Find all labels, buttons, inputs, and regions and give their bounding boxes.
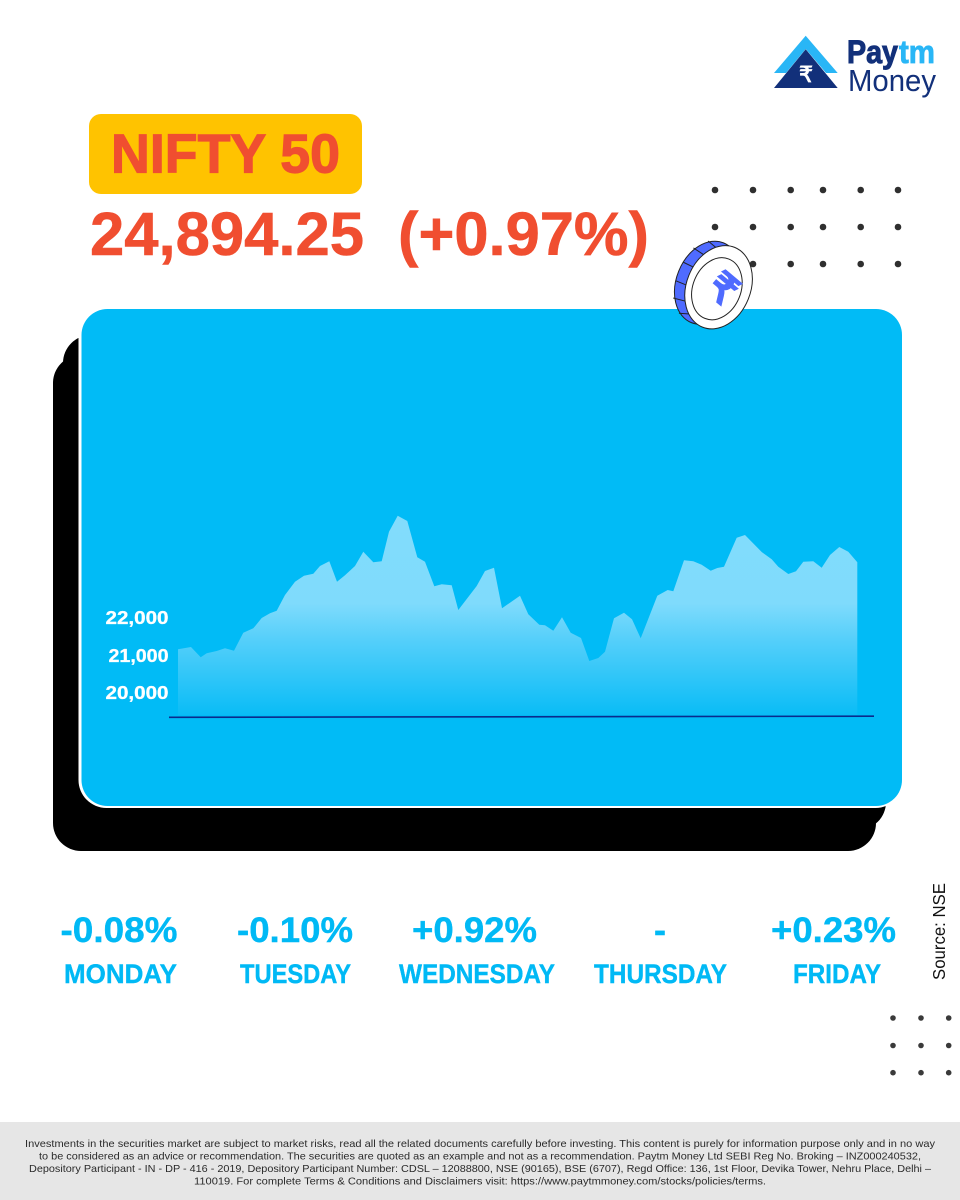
dot grid: top right: [712, 187, 901, 267]
stat: Thursday: [594, 911, 727, 989]
axis label: 21,000: 21,000: [108, 646, 168, 666]
stat: Monday: MONDAY: [64, 959, 177, 989]
stat: Friday: +0.23%: [771, 911, 896, 950]
footer disclaimer: [0, 1122, 960, 1200]
stat: Wednesday: WEDNESDAY: [399, 959, 555, 989]
stat: Tuesday: TUESDAY: [240, 959, 351, 989]
logo wordmark: Money: Money: [848, 63, 936, 98]
area chart: [178, 516, 857, 715]
stat: Wednesday: +0.92%: [412, 911, 537, 950]
stat: Monday: -0.08%: [60, 911, 178, 950]
index change: (+0.97%): [398, 200, 649, 268]
axis label: 22,000: 22,000: [106, 608, 168, 628]
footer disclaimer: to be considered as an advice or recommendation. The securities are quoted as an example and not as a recommendation. Paytm Money Ltd SEBI Reg No. Broking – INZ000240532,: [39, 1152, 921, 1162]
axis label: 20,000: 20,000: [106, 683, 168, 703]
footer disclaimer: Investments in the securities market are subject to market risks, read all the related documents carefully before investing. This content is purely for information purpose only and in no way: [25, 1139, 936, 1150]
black card shadow: [53, 335, 886, 851]
logo: Paytm Money: [774, 34, 936, 98]
source note: Source: NSE: [929, 883, 949, 980]
title badge: NIFTY 50: NIFTY 50: [111, 122, 340, 184]
stat: Wednesday: [399, 911, 555, 989]
stat: Tuesday: -0.10%: [237, 911, 353, 950]
panel: chart card: [78, 308, 904, 808]
logo wordmark: Pay: Pay: [847, 34, 898, 70]
footer disclaimer: Depository Participant - IN - DP - 416 - 2019, Depository Participant Number: CDSL – 12088800, NSE (90165), BSE (6707), Regd Office: 136, 1st Floor, Devika Tower, Nehru Place, Delhi –: [29, 1164, 931, 1175]
stat: Friday: [771, 911, 896, 989]
stat: Tuesday: [237, 911, 353, 989]
logo wordmark: tm: tm: [899, 34, 935, 70]
icon: logo triangles with rupee: [774, 36, 838, 88]
stat: Thursday: THURSDAY: [594, 959, 727, 989]
icon: rupee coin: [663, 231, 764, 339]
stat: Friday: FRIDAY: [793, 959, 881, 989]
footer disclaimer: 110019. For complete Terms & Conditions and Disclaimers visit: https://www.paytmmoney.com/stocks/policies/terms.: [194, 1176, 766, 1188]
chart baseline: [169, 716, 874, 717]
icon: logo triangles with rupee: ₹: [799, 62, 813, 87]
icon: rupee coin: ₹: [698, 264, 746, 314]
title badge: NIFTY 50: [89, 114, 362, 194]
dot grid: bottom right: [890, 1015, 952, 1075]
stat: Thursday: -: [654, 911, 666, 950]
index value: 24,894.25: [90, 200, 364, 268]
stat: Monday: [60, 911, 178, 989]
